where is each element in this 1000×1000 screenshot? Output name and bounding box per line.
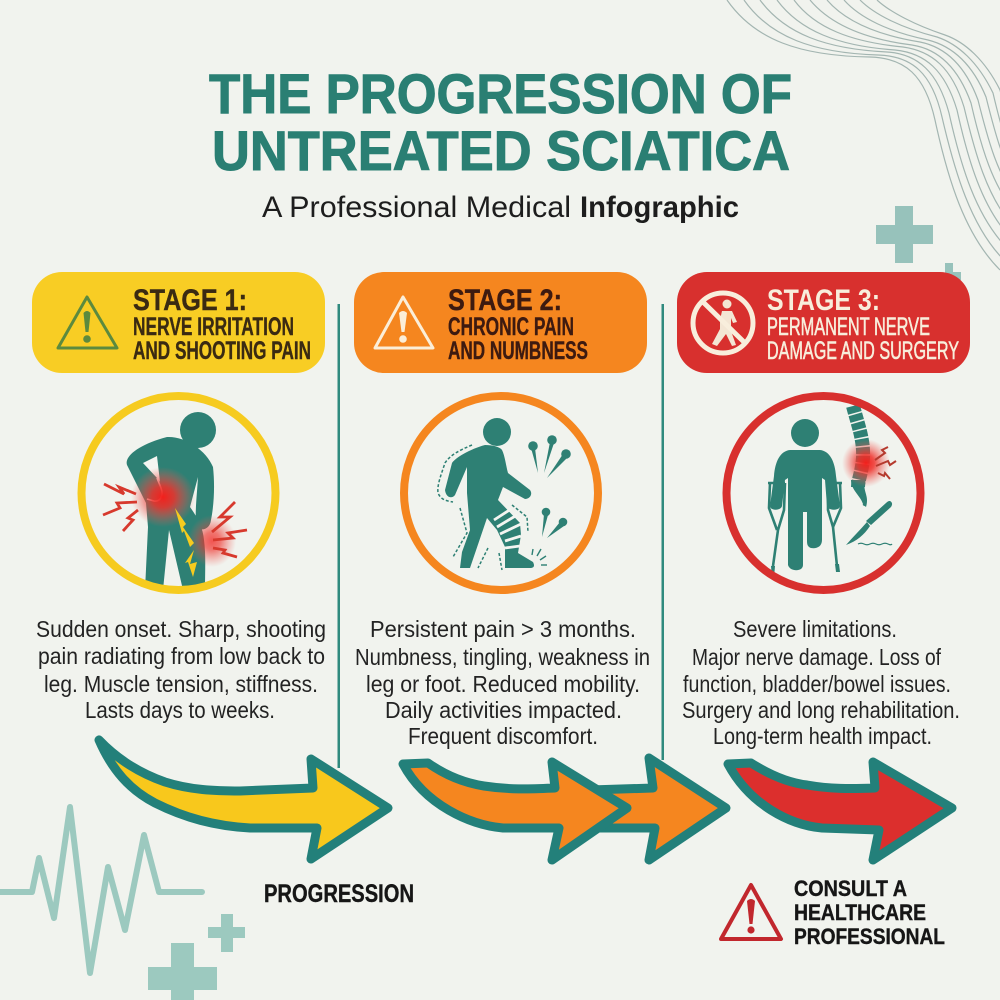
heartbeat line bbox=[0, 807, 202, 973]
progression label: PROGRESSION bbox=[264, 880, 414, 908]
callout text bbox=[794, 876, 945, 949]
icon: person with numb bandaged leg bbox=[438, 418, 571, 570]
stage 3 description: Major nerve damage. Loss of bbox=[692, 644, 941, 670]
callout: consult a healthcare professional bbox=[721, 876, 945, 949]
stage 3 description: Severe limitations. bbox=[733, 616, 897, 642]
title: THE PROGRESSION OF bbox=[209, 62, 792, 125]
stage 3 heading bbox=[767, 284, 959, 365]
stage 2 header bbox=[354, 272, 647, 373]
icon ring stage 3 bbox=[726, 396, 920, 590]
stage 3 description: Surgery and long rehabilitation. bbox=[682, 697, 960, 723]
stage 3 header bbox=[677, 272, 970, 373]
title bbox=[209, 62, 792, 182]
stage 1 heading bbox=[133, 284, 311, 365]
icon: warning triangle stage 2 bbox=[375, 297, 433, 348]
icon: person on crutches with spine and scalpel bbox=[768, 406, 896, 572]
stage 3 description: function, bladder/bowel issues. bbox=[683, 671, 951, 697]
icon: warning triangle stage 1 bbox=[58, 297, 117, 348]
subtitle: Infographic bbox=[580, 191, 739, 224]
callout text: PROFESSIONAL bbox=[794, 924, 945, 949]
stage 2 description: Persistent pain > 3 months. bbox=[370, 616, 636, 642]
stage 1 heading: AND SHOOTING PAIN bbox=[133, 337, 311, 365]
stage 1 header bbox=[32, 272, 325, 373]
stage 1 heading: STAGE 1: bbox=[133, 284, 247, 317]
icon: small cross behind stage 3 bbox=[945, 263, 961, 280]
stage 1 description: pain radiating from low back to bbox=[38, 643, 325, 669]
decorative wave lines bbox=[727, 0, 1000, 270]
stage 2 heading: AND NUMBNESS bbox=[448, 337, 588, 365]
icon: red warning triangle bbox=[721, 885, 781, 939]
subtitle bbox=[262, 191, 739, 224]
icon ring stage 2 bbox=[404, 396, 598, 590]
panel: stage 1 bbox=[32, 272, 326, 723]
callout text: CONSULT A bbox=[794, 876, 907, 901]
subtitle: A Professional Medical bbox=[262, 191, 571, 224]
callout text: HEALTHCARE bbox=[794, 900, 926, 925]
stage 2 heading bbox=[448, 284, 588, 365]
divider line 2 bbox=[662, 304, 664, 760]
stage 3 description bbox=[682, 616, 960, 749]
stage 2 description: leg or foot. Reduced mobility. bbox=[366, 671, 640, 697]
stage 2 description: Daily activities impacted. bbox=[385, 697, 622, 723]
icon: top right medical cross bbox=[876, 206, 933, 263]
stage 1 description: Lasts days to weeks. bbox=[85, 697, 275, 723]
stage 2 description: Frequent discomfort. bbox=[408, 723, 598, 749]
stage 3 description: Long-term health impact. bbox=[713, 723, 932, 749]
panel: stage 2 bbox=[354, 272, 650, 749]
stage 1 heading: NERVE IRRITATION bbox=[133, 313, 294, 341]
stage 1 description: leg. Muscle tension, stiffness. bbox=[44, 671, 318, 697]
stage 2 description bbox=[355, 616, 650, 749]
icon: no walking sign bbox=[693, 293, 753, 353]
panel: stage 3 bbox=[677, 272, 970, 749]
title: UNTREATED SCIATICA bbox=[212, 119, 790, 182]
icon: small medical cross bbox=[208, 914, 245, 952]
arrow: orange stage 2 front bbox=[403, 762, 627, 860]
icon ring stage 1 bbox=[82, 396, 276, 590]
arrow: orange stage 2 rear bbox=[590, 758, 726, 860]
stage 3 heading: STAGE 3: bbox=[767, 284, 880, 317]
stage 2 heading: STAGE 2: bbox=[448, 284, 562, 317]
stage 1 description bbox=[36, 616, 326, 723]
icon: large medical cross bbox=[148, 943, 217, 1000]
arrow: red stage 3 bbox=[728, 762, 952, 860]
divider line 1 bbox=[338, 304, 340, 768]
icon: person with back and leg pain bbox=[103, 412, 247, 590]
stage 2 description: Numbness, tingling, weakness in bbox=[355, 644, 650, 670]
stage 1 description: Sudden onset. Sharp, shooting bbox=[36, 616, 326, 642]
arrow: yellow stage 1 bbox=[99, 740, 388, 859]
stage 2 heading: CHRONIC PAIN bbox=[448, 313, 574, 341]
